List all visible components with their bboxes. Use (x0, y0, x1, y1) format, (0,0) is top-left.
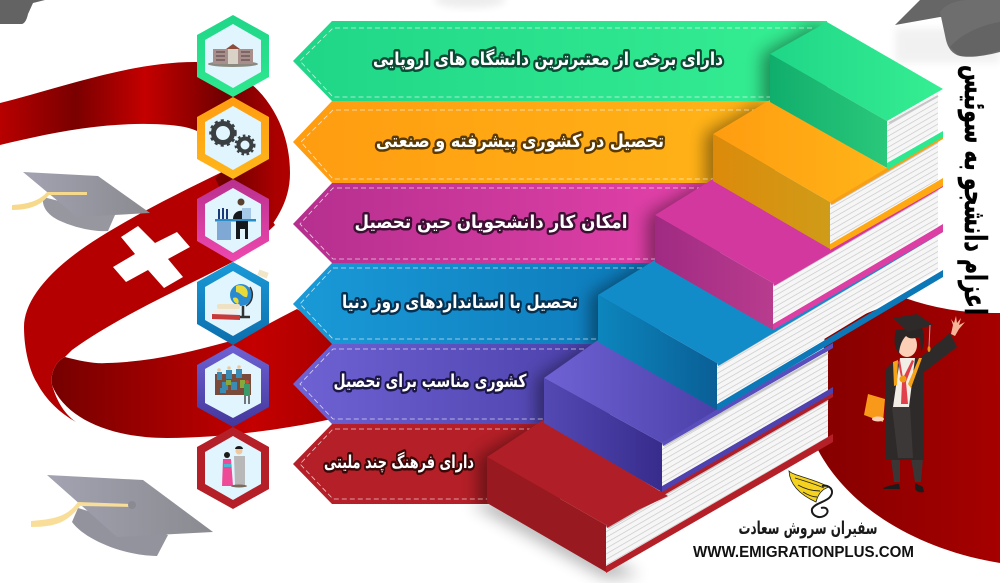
title: vertical heading: اعزام دانشجو به سوئیس (957, 65, 992, 315)
icon: classroom (215, 365, 251, 404)
raised hand (951, 316, 965, 336)
graduate figure (864, 314, 965, 492)
label 5: suitable country: کشوری مناسب برای تحصیل (334, 371, 527, 392)
pants front (892, 407, 913, 458)
label 2: industrial country (293, 101, 775, 190)
graduation cap: top centre shadow (434, 0, 506, 8)
book 6: red (487, 392, 833, 573)
label 5: suitable country (293, 344, 610, 430)
step 6 hexagon: traditional couple (197, 427, 269, 509)
ribbon diagonal band (24, 170, 275, 422)
face (897, 333, 917, 357)
icon: university building (208, 44, 258, 67)
logo wing (789, 471, 829, 502)
logo URL: WWW.EMIGRATIONPLUS.COM (693, 544, 914, 561)
ribbon: red Swiss ribbon (0, 62, 345, 438)
logo (693, 471, 914, 561)
shirt (893, 358, 915, 407)
gown (885, 333, 957, 460)
medal (900, 376, 906, 382)
step 2 hexagon: gears (197, 97, 269, 179)
graduation cap: top left (0, 0, 45, 24)
label 1: top universities: دارای برخی از معتبرترین دانشگاه های اروپایی (373, 48, 723, 70)
shoes (883, 483, 924, 492)
mortarboard (893, 314, 933, 332)
label 6: multicultural: دارای فرهنگ چند ملیتی (324, 451, 474, 473)
ribbon top band (0, 62, 290, 250)
graduation cap: left (12, 172, 150, 231)
logo wing feather lines (795, 478, 824, 497)
hair (895, 328, 924, 353)
step 4 hexagon: globe and books (197, 262, 269, 345)
tassel tip (928, 346, 930, 352)
hand under book (872, 416, 884, 422)
icon: globe with books (212, 269, 269, 320)
tassel (929, 325, 930, 347)
graduation cap: bottom (31, 475, 213, 556)
graduation cap: top right (895, 0, 1000, 63)
book 3: magenta (655, 179, 943, 330)
book 1: green (770, 22, 943, 170)
icon: person at desk (215, 198, 256, 240)
step 3 hexagon: office worker (197, 179, 269, 262)
red tie (898, 360, 914, 404)
label 4: world standards (293, 262, 660, 350)
icon: couple in traditional dress (222, 446, 247, 488)
book 4: blue (598, 228, 943, 411)
logo swan S (812, 486, 832, 517)
right red shape (818, 298, 1000, 563)
ribbon lower band (52, 309, 345, 438)
orange stole (893, 358, 922, 388)
book 2: orange (713, 100, 943, 250)
icon: gears (211, 121, 254, 154)
label 3: student work (293, 183, 720, 263)
book 5: purple (544, 340, 833, 492)
step 5 hexagon: classroom (197, 345, 269, 427)
Swiss cross (113, 226, 190, 288)
step 1 hexagon: university (197, 15, 269, 97)
legs (891, 458, 923, 482)
logo Persian name: سفیران سروش سعادت (738, 518, 878, 539)
label 6: multicultural (293, 424, 560, 510)
book in hand (864, 394, 885, 422)
label 3: student work: امکان کار دانشجویان حین تحصیل (354, 212, 628, 233)
label 4: world standards: تحصیل با استانداردهای روز دنیا (342, 292, 578, 313)
label 1: top universities (293, 21, 827, 108)
label 2: industrial country: تحصیل در کشوری پیشرفته و صنعتی (376, 131, 664, 152)
books shadow (470, 500, 640, 578)
